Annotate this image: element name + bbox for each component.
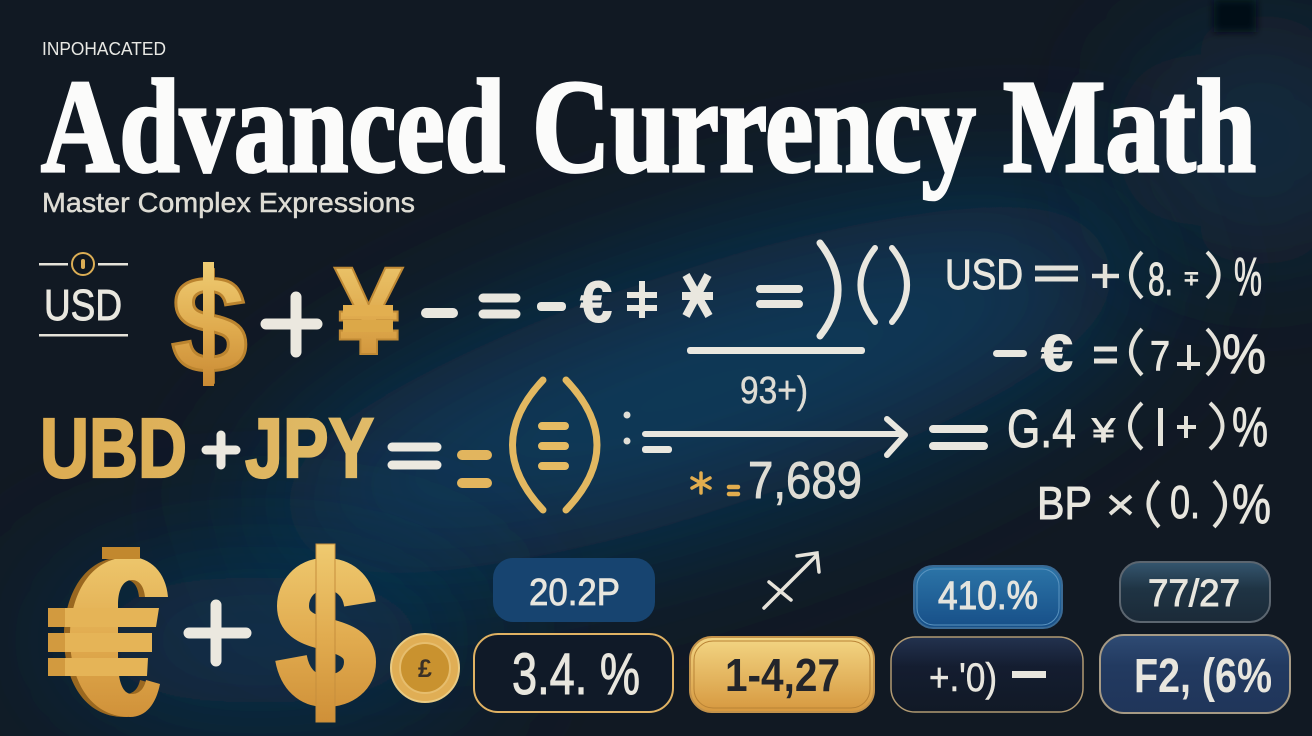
pill: 3.4 percent: 3.4. % (512, 642, 640, 707)
formula line one: ∓ (1183, 268, 1200, 290)
formula line four: BP (1037, 477, 1092, 529)
pill: ratio (1120, 562, 1270, 622)
icon: gold dollar: $ (171, 248, 248, 402)
pill: gold value: 1-4,27 (725, 649, 840, 701)
pill: ratio: 77/27 (1148, 573, 1240, 615)
formula line two: 7 (1150, 332, 1170, 379)
bottom currency symbols (48, 544, 459, 722)
subtitle: Master Complex Expressions (42, 187, 415, 218)
pill: 3.4 percent (474, 634, 673, 712)
USD badge: USD (44, 281, 122, 330)
small dash (642, 446, 672, 453)
formula line three: % (1232, 395, 1268, 458)
pill: 20.2P (493, 558, 655, 622)
pill: blue percent: 410.% (938, 574, 1038, 618)
pill: 20.2P: 20.2P (529, 572, 620, 614)
USD badge (39, 253, 128, 336)
pill: dark expression: +.'0) (929, 656, 997, 700)
divide-like operator (627, 281, 657, 318)
gold stacked bars (542, 426, 565, 466)
formula line one: 8. (1148, 253, 1173, 305)
equation row two (40, 380, 984, 510)
equals (483, 298, 516, 314)
pill: blue percent (914, 566, 1062, 628)
parentheses pair (860, 248, 907, 322)
icon: gold yen: ¥ (334, 242, 404, 381)
pill: dark expression (891, 637, 1083, 712)
gold equals (462, 455, 487, 483)
gold JPY label: JPY (245, 401, 374, 495)
denominator: 93+) (740, 370, 808, 412)
gold parentheses (512, 380, 597, 510)
result value: 7,689 (748, 452, 862, 510)
formula line one (945, 247, 1262, 307)
formula line three: G.4 (1007, 399, 1076, 459)
minus (421, 308, 458, 318)
icon: gold dollar (291, 544, 360, 722)
euro symbol: € (580, 270, 612, 335)
plus (189, 605, 246, 661)
colon (624, 412, 630, 444)
value pills (474, 553, 1290, 713)
formula line one: % (1234, 247, 1262, 307)
long arrow (645, 419, 905, 455)
white equals (392, 447, 437, 465)
pill: gold value (690, 637, 874, 712)
formula line three: ¥ (1091, 412, 1115, 450)
formula line two (993, 322, 1266, 385)
right formula column (945, 247, 1271, 535)
gold UBD label: UBD (40, 401, 187, 495)
icon: diagonal arrow (764, 553, 819, 608)
formula line four: % (1232, 472, 1271, 535)
formula line two: % (1222, 322, 1266, 385)
x operator (682, 275, 713, 316)
icon: gold coin: £ (418, 655, 432, 683)
pill: navy percent: F2, (6% (1134, 650, 1272, 703)
formula line three (1007, 395, 1268, 459)
big equals (933, 429, 984, 446)
plus (266, 297, 317, 352)
header (41, 39, 1256, 218)
formula line four: 0. (1170, 476, 1200, 528)
minus (537, 302, 566, 311)
fraction bar (687, 347, 865, 354)
formula line four (1037, 472, 1271, 535)
gold asterisk (692, 473, 710, 493)
large parenthesis (820, 243, 838, 336)
eyebrow label: INPOHACATED (42, 39, 166, 59)
formula line two: € (1041, 325, 1073, 383)
small gold equals (729, 487, 738, 494)
icon: gold coin (391, 634, 459, 702)
pill: navy percent (1100, 635, 1290, 713)
equation row one (171, 242, 907, 412)
plus (206, 435, 236, 465)
icon: 3D euro (48, 547, 168, 717)
formula line one: USD (945, 251, 1023, 299)
equals (760, 289, 799, 304)
